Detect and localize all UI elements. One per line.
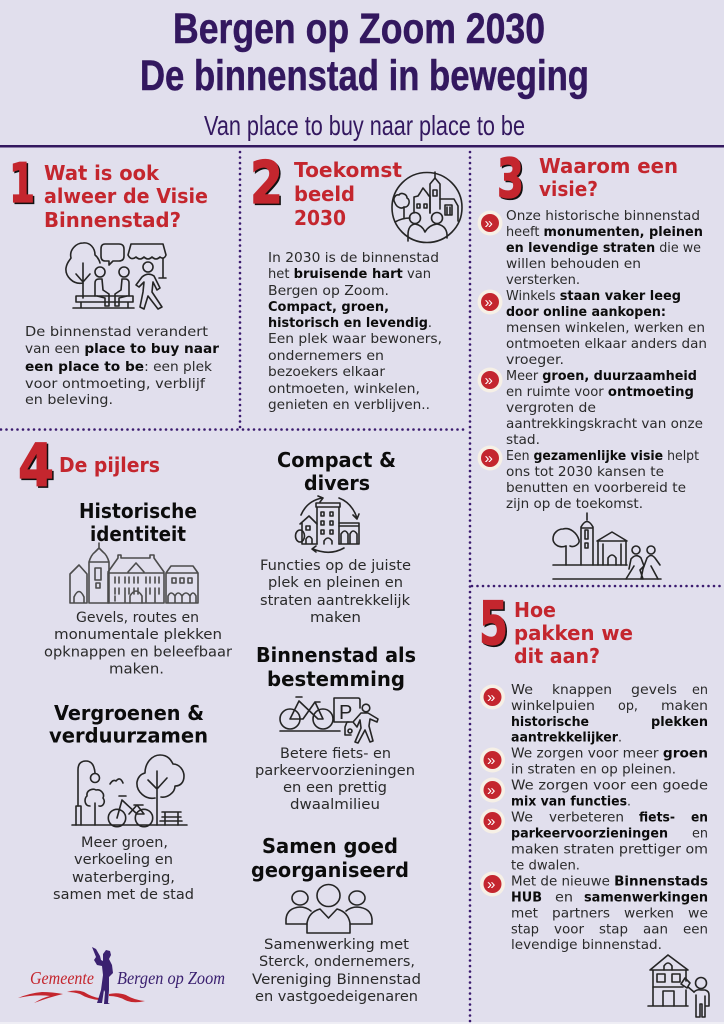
text block 1: een place to be: een plek (25, 359, 212, 375)
heading 3: Waarom een (539, 154, 678, 178)
heading 2: 2030 (294, 206, 346, 230)
heading 1: Wat is ook (44, 161, 160, 185)
icon: city in circle (392, 172, 462, 242)
pillar: compact en divers (260, 448, 411, 626)
icon: buildings with cycle arrows (296, 496, 359, 552)
text block 5: stap (511, 922, 539, 938)
text block 5: levendige binnenstad. (511, 937, 662, 953)
text block 3: willen behouden en (506, 256, 641, 272)
text block 5: We zorgen voor een goede (511, 778, 708, 794)
text block 5: een (683, 922, 708, 938)
bullets 5: » (487, 876, 495, 893)
pillar: binnenstad als bestemming: en een prettig (283, 780, 387, 796)
text block 2: ondernemers en (268, 348, 384, 364)
text block 5: fiets- (639, 810, 675, 826)
pillar: historische identiteit (44, 499, 232, 678)
pillar: binnenstad als bestemming: Betere fiets- en (280, 746, 391, 762)
bullets 5 (480, 684, 505, 896)
panel: 1 wat is de visie (9, 152, 219, 408)
pillar: compact en divers: straten aantrekkelijk (260, 593, 410, 609)
pillar: compact en divers: maken (310, 610, 361, 626)
text block 2: In 2030 is de binnenstad (268, 250, 439, 266)
pillar: historische identiteit: opknappen en beleefbaar (44, 644, 232, 660)
number 5: 5 (480, 590, 510, 660)
text block 3: door online aankopen: (506, 304, 666, 320)
panel: 4 de pijlers (18, 431, 421, 1005)
icon: bicycle parking and walker (280, 697, 378, 743)
title: De binnenstad in beweging (140, 52, 589, 100)
pillar: binnenstad als bestemming: parkeervoorzieningen (255, 763, 415, 779)
number 2: 2 (250, 148, 283, 217)
pillar: historische identiteit: identiteit (90, 522, 186, 546)
icon: house and painter (648, 955, 709, 1017)
text block 5: te dwalen. (511, 858, 580, 874)
pillar: vergroenen en verduurzamen: verduurzamen (49, 724, 208, 748)
text block 5: samenwerkingen (584, 890, 708, 906)
heading 4: De pijlers (59, 453, 160, 477)
bullets 5: » (487, 689, 495, 706)
pillar: vergroenen en verduurzamen: Vergroenen & (54, 701, 204, 725)
icon: historic buildings (70, 543, 198, 603)
pillar: samen goed georganiseerd (251, 834, 421, 1005)
heading 5: pakken we (514, 621, 633, 645)
pillar: historische identiteit: Historische (79, 499, 197, 523)
text block 2 (268, 250, 442, 413)
bullets 3: » (484, 215, 493, 232)
text block 5: maken straten prettiger om (511, 842, 708, 858)
pillar: binnenstad als bestemming: Binnenstad als (256, 643, 416, 667)
text block 3: ons tot 2030 kansen te (506, 464, 664, 480)
text block 2: historisch en levendig. (268, 315, 432, 331)
text block 1: De binnenstad verandert (25, 324, 208, 340)
text block 5: verbeteren (549, 810, 624, 826)
subtitle: Van place to buy naar place to be (204, 110, 525, 141)
pillar: samen goed georganiseerd: georganiseerd (251, 858, 409, 882)
text block 5: in straten en op pleinen. (511, 762, 676, 778)
pillar: vergroenen en verduurzamen: Meer groen, (81, 835, 168, 851)
number 1: 1 (10, 154, 36, 216)
icon: park with bicycle (72, 755, 187, 827)
text block 3: en ruimte voor ontmoeting (506, 384, 694, 400)
text block 5: mix van functies. (511, 794, 631, 810)
text block 5 (511, 682, 708, 953)
logo: Gemeente Bergen op Zoom: Gemeente (30, 968, 94, 988)
text block 5: We (511, 682, 533, 698)
text block 3: heeft monumenten, pleinen (506, 224, 703, 240)
text block 5: voor (554, 922, 584, 938)
pillar: compact en divers: Compact & (277, 448, 396, 472)
heading 3 (539, 154, 678, 201)
text block 2: genieten en verblijven.. (268, 397, 430, 413)
text block 3: versterken. (506, 272, 580, 288)
text block 3: Winkels staan vaker leeg (506, 288, 681, 304)
pillar: compact en divers: Functies op de juiste (260, 558, 411, 574)
pillar: historische identiteit: monumentale plekken (54, 627, 222, 643)
icon: people on bench (66, 243, 166, 309)
text block 5: We (511, 810, 533, 826)
text block 5: winkelpuien (511, 698, 595, 714)
text block 3: Meer groen, duurzaamheid (506, 368, 697, 384)
heading 1 (44, 161, 208, 232)
pillar: compact en divers: plek en pleinen en (268, 575, 403, 591)
text block 1: en beleving. (25, 392, 113, 408)
icon: church and walkers (553, 513, 661, 579)
pillar: vergroenen en verduurzamen (49, 701, 208, 903)
title: Bergen op Zoom 2030 (173, 5, 545, 53)
pillar: vergroenen en verduurzamen: verkoeling en (74, 852, 173, 868)
text block 5: op, (618, 698, 638, 714)
bullets 3 (478, 210, 502, 470)
text block 2: bezoekers elkaar (268, 364, 385, 380)
pillar: samen goed georganiseerd: Samen goed (262, 834, 398, 858)
text block 1: van een place to buy naar (25, 341, 219, 357)
text block 5: gevels (631, 682, 677, 698)
bullets 5: » (487, 782, 495, 799)
text block 3: stad. (506, 432, 540, 448)
bullets 3: » (484, 294, 493, 311)
text block 5: partners (552, 906, 610, 922)
text block 2: Bergen op Zoom. (268, 283, 389, 299)
text block 3 (506, 208, 707, 512)
bullets 3: » (484, 372, 493, 389)
pillar: vergroenen en verduurzamen: waterberging, (72, 870, 175, 886)
panel: 5 hoe pakken we dit aan (479, 589, 709, 1017)
bullets 5: » (487, 813, 495, 830)
heading 5 (514, 598, 633, 668)
text block 1: voor ontmoeting, verblijf (25, 376, 206, 392)
text block 3: benutten en voorbereid te (506, 480, 686, 496)
text block 3: vroeger. (506, 352, 564, 368)
text block 3: zijn op de toekomst. (506, 496, 643, 512)
text block 5: stap (599, 922, 628, 938)
heading 1: alweer de Visie (44, 184, 208, 208)
text block 2: het bruisende hart van (268, 266, 431, 282)
pillar: samen goed georganiseerd: Sterck, ondernemers, (259, 954, 415, 970)
number 3: 3 (498, 148, 526, 212)
logo: Gemeente Bergen op Zoom: Bergen op Zoom (117, 968, 225, 988)
pillar: binnenstad als bestemming: bestemming (267, 667, 405, 691)
heading 5: Hoe (514, 598, 556, 622)
text block 5: knappen (552, 682, 612, 698)
text block 5: met (511, 906, 538, 922)
number 3: 3 (497, 147, 524, 210)
text block 3: vergroten de (506, 400, 596, 416)
text block 5: aan (643, 922, 668, 938)
heading 2: Toekomst (294, 158, 402, 182)
number 2: 2 (252, 150, 284, 218)
pillar: vergroenen en verduurzamen: samen met de stad (53, 887, 194, 903)
text block 1 (25, 324, 219, 408)
heading 3: visie? (539, 177, 598, 201)
pillar: historische identiteit: Gevels, routes en (76, 610, 199, 626)
text block 5: en (555, 890, 573, 906)
heading 2: beeld (294, 182, 355, 206)
text block 2: Compact, groen, (268, 299, 389, 315)
text block 3: ontmoeten elkaar anders dan (506, 336, 707, 352)
bullets 5: » (487, 752, 495, 769)
pillar: binnenstad als bestemming (255, 643, 416, 813)
number 4: 4 (20, 432, 56, 502)
text block 5: en (692, 682, 708, 698)
pillar: binnenstad als bestemming: dwaalmilieu (290, 797, 380, 813)
pillar: samen goed georganiseerd: Vereniging Binnenstad (252, 972, 421, 988)
logo: Gemeente Bergen op Zoom (18, 947, 225, 1004)
icon: three people (286, 884, 372, 933)
text block 5: HUB (511, 890, 542, 906)
pillar: historische identiteit: maken. (109, 662, 164, 678)
text block 5: plekken (651, 714, 708, 730)
icon: bicycle parking and walker: P (339, 702, 352, 724)
text block 5: aantrekkelijker. (511, 730, 622, 746)
pillar: samen goed georganiseerd: en vastgoedeigenaren (255, 989, 418, 1005)
text block 5: maken (661, 698, 708, 714)
text block 5: parkeervoorzieningen (511, 826, 668, 842)
title (140, 5, 589, 100)
text block 3: Onze historische binnenstad (506, 208, 700, 224)
text block 5: en (692, 826, 708, 842)
text block 2: ontmoeten, winkelen, (268, 381, 420, 397)
text block 5: we (688, 906, 708, 922)
text block 2: Een plek waar bewoners, (268, 331, 442, 347)
text block 5: werken (624, 906, 674, 922)
text block 5: Met de nieuwe Binnenstads (511, 874, 708, 890)
bullets 3: » (484, 450, 493, 467)
number 4: 4 (18, 431, 54, 500)
heading 5: dit aan? (514, 644, 600, 668)
text block 5: historische (511, 714, 589, 730)
text block 5: We zorgen voor meer groen (511, 746, 708, 762)
panel: 2 toekomstbeeld (250, 148, 462, 413)
pillar: samen goed georganiseerd: Samenwerking met (264, 937, 410, 953)
pillar: compact en divers: divers (304, 471, 370, 495)
number 1: 1 (9, 152, 35, 215)
number 5: 5 (479, 589, 508, 659)
text block 3: en levendige straten die we (506, 240, 701, 256)
text block 3: Een gezamenlijke visie helpt (506, 448, 699, 464)
text block 5: en (691, 810, 708, 826)
text block 3: mensen winkelen, werken en (506, 320, 705, 336)
heading 1: Binnenstad? (44, 208, 181, 232)
text block 3: aantrekkingskracht van onze (506, 416, 703, 432)
heading 2 (294, 158, 402, 230)
panel: 3 waarom een visie (478, 147, 707, 579)
